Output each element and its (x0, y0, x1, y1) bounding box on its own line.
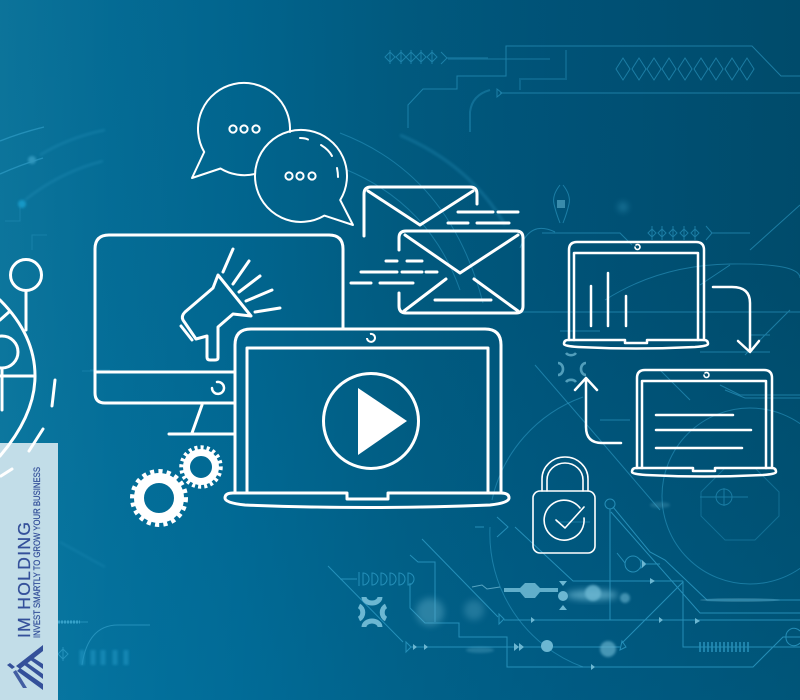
laptop base (225, 493, 509, 508)
monitor with megaphone (95, 235, 343, 434)
laptop frame (235, 329, 501, 493)
arrow up (575, 378, 621, 443)
envelopes (351, 187, 523, 313)
bubble dots left (229, 125, 260, 133)
bubble highlight (300, 138, 338, 177)
speech bubbles (192, 83, 353, 225)
front envelope (399, 231, 523, 313)
play button (324, 374, 418, 468)
laptop camera (367, 334, 375, 342)
monitor stand (169, 405, 234, 434)
middle circuit chips (520, 185, 800, 510)
cycle of laptops (564, 242, 776, 476)
pale circuit nodes (413, 502, 780, 670)
monitor camera (212, 382, 224, 394)
icon: megaphone (182, 275, 251, 360)
speech bubble right (255, 130, 353, 225)
arrow down (713, 287, 759, 352)
back envelope (364, 187, 477, 236)
chart laptop (564, 242, 708, 348)
icon: gears (132, 448, 220, 524)
brand name: IM HOLDING (14, 522, 34, 638)
text laptop (632, 370, 776, 476)
main laptop with play button (225, 329, 509, 508)
megaphone rays (223, 249, 280, 312)
panel: brand sidebar (0, 443, 58, 700)
icon: logo (7, 645, 43, 690)
speech bubble left (192, 83, 290, 178)
pale x symbols (359, 353, 586, 627)
speed dashes (351, 212, 518, 283)
brand tagline: INVEST SMARTLY TO GROW YOUR BUSINESS (32, 467, 43, 638)
bottom-left faint traces (58, 542, 150, 665)
icon: padlock (533, 457, 595, 553)
bubble dots right (285, 172, 316, 180)
upper arcs (340, 133, 505, 303)
top circuit traces (385, 46, 800, 132)
lower circuit traces (328, 499, 800, 667)
globe icon (0, 260, 55, 476)
large circles (490, 264, 800, 667)
monitor frame (95, 235, 343, 403)
left faint arcs (0, 127, 110, 371)
